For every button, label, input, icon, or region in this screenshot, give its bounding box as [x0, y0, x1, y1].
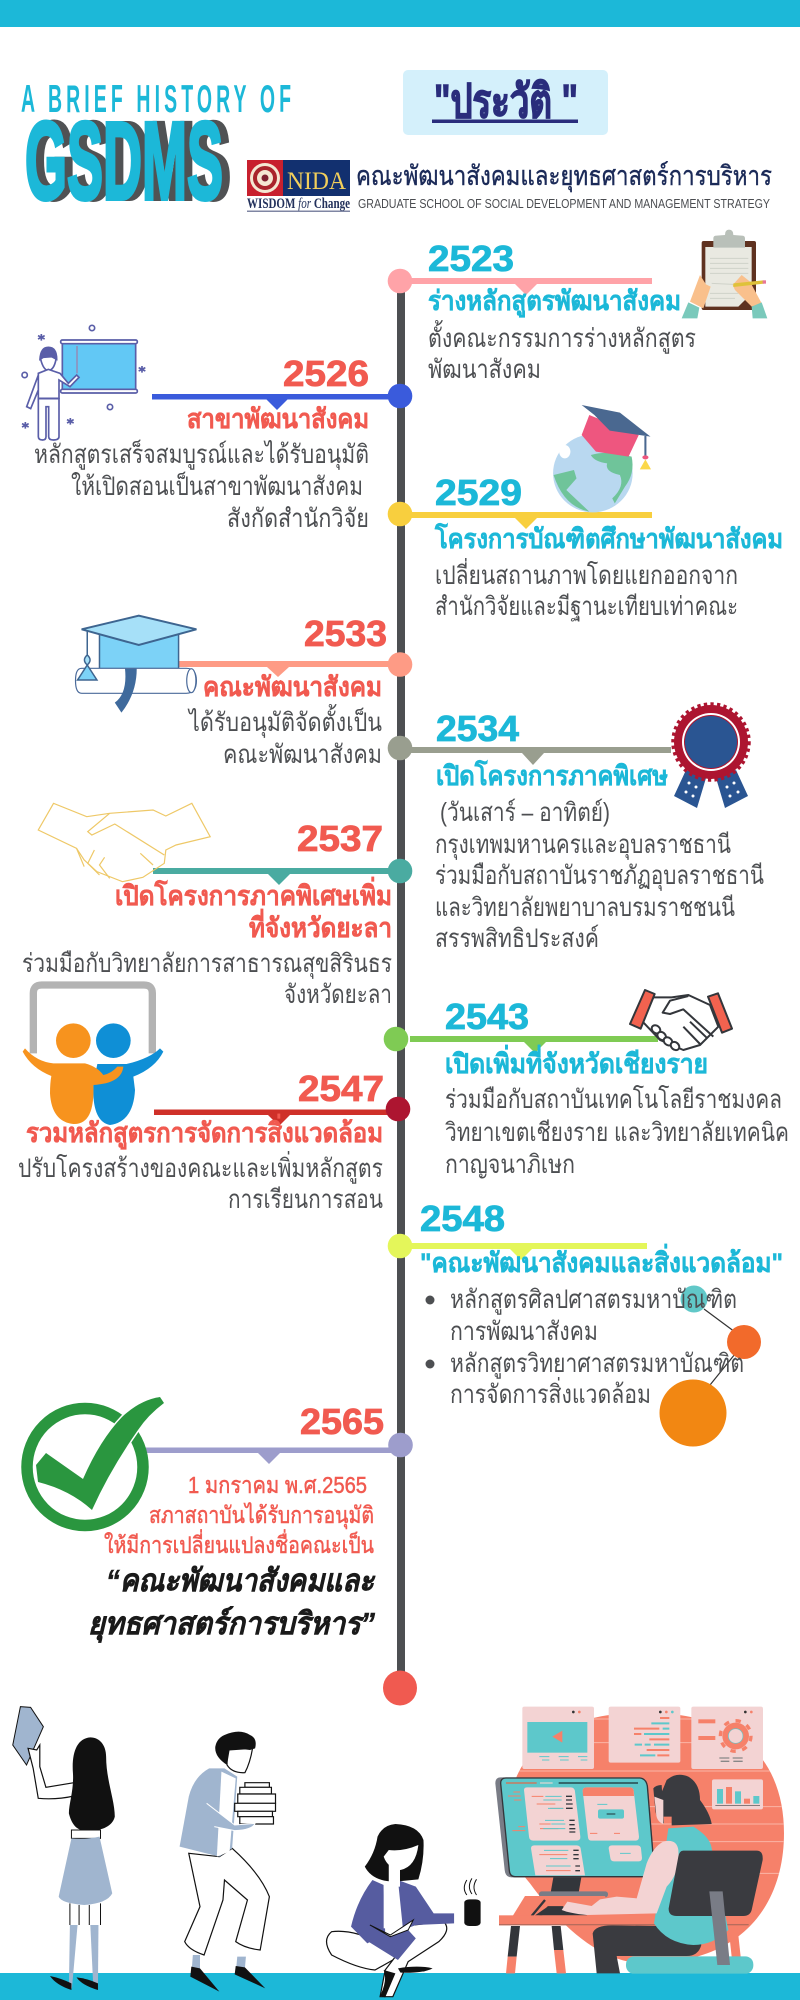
- heading badge: history: "ประวัติ ": [434, 75, 578, 127]
- text 2529: เปลี่ยนสถานภาพโดยแยกออกจาก: [435, 558, 738, 590]
- desk: [499, 1896, 749, 1973]
- programmes list 2548: หลักสูตรวิทยาศาสตรมหาบัณฑิต: [450, 1350, 744, 1379]
- decoration: connected circles: [660, 1286, 761, 1446]
- year 2543: 2543: [445, 996, 529, 1037]
- new faculty name: “คณะพัฒนาสังคมและ: [106, 1563, 376, 1598]
- heading 2537: เปิดโครงการภาคพิเศษเพิ่ม: [115, 876, 392, 911]
- icon: graduation cap and diploma: [76, 616, 196, 713]
- timeline end dot: [383, 1670, 417, 1706]
- illustration: girl holding book: [13, 1707, 115, 1990]
- illustration: woman reading with coffee: [327, 1824, 481, 1997]
- entry 2543: [384, 996, 789, 1179]
- year 2537: 2537: [297, 818, 383, 859]
- heading 2533: คณะพัฒนาสังคม: [203, 672, 382, 702]
- text 2523: พัฒนาสังคม: [428, 356, 541, 384]
- text 2526: หลักสูตรเสร็จสมบูรณ์และได้รับอนุมัติ: [34, 439, 369, 470]
- NIDA logo: NIDA: [287, 168, 346, 195]
- text 2565: ให้มีการเปลี่ยนแปลงชื่อคณะเป็น: [104, 1529, 374, 1558]
- text 2547: ปรับโครงสร้างของคณะและเพิ่มหลักสูตร: [18, 1151, 383, 1184]
- icon: teacher at board: [22, 325, 145, 440]
- title: A Brief History of GSDMS: [21, 77, 291, 223]
- heading 2543: เปิดเพิ่มที่จังหวัดเชียงราย: [445, 1044, 708, 1079]
- top banner: [0, 0, 800, 27]
- programmes list 2548: การพัฒนาสังคม: [450, 1318, 598, 1346]
- text 2533: [187, 704, 382, 769]
- text 2565: 1 มกราคม พ.ศ.2565: [188, 1472, 367, 1498]
- bar chart panel: [712, 1779, 763, 1809]
- text 2534: [435, 798, 764, 953]
- icon: green check mark: [27, 1397, 164, 1526]
- year 2526: 2526: [283, 353, 369, 394]
- heading 2526: สาขาพัฒนาสังคม: [187, 404, 369, 434]
- new faculty name: ยุทธศาสตร์การบริหาร”: [88, 1606, 375, 1643]
- text 2523: ตั้งคณะกรรมการร่างหลักสูตร: [428, 320, 696, 354]
- salmon background circle: [516, 1715, 784, 1962]
- entry 2526: [34, 353, 412, 533]
- heading 2534: เปิดโครงการภาคพิเศษ: [436, 759, 668, 791]
- year 2548: 2548: [420, 1198, 505, 1239]
- text 2565: [104, 1472, 374, 1558]
- text 2547: การเรียนการสอน: [228, 1186, 383, 1214]
- year 2533: 2533: [304, 613, 387, 654]
- programmes list 2548: หลักสูตรศิลปศาสตรมหาบัณฑิต: [450, 1286, 737, 1315]
- entry 2537: [22, 818, 412, 1009]
- text 2565: สภาสถาบันได้รับการอนุมัติ: [149, 1502, 374, 1529]
- text 2537: ร่วมมือกับวิทยาลัยการสาธารณสุขสิรินธร: [22, 950, 392, 979]
- icon: award rosette: [673, 704, 749, 808]
- illustration: woman at computer with dashboards: [495, 1707, 790, 1974]
- bottom banner: [0, 1973, 800, 2000]
- text 2523: [428, 320, 696, 384]
- NIDA logo: WISDOM for Change: [247, 196, 350, 212]
- year 2547: 2547: [298, 1068, 384, 1109]
- text 2537: [22, 950, 392, 1009]
- new faculty name: [88, 1563, 376, 1643]
- GSDMS wordmark: GSDMS: [25, 100, 223, 223]
- icon: globe with graduation cap: [553, 405, 651, 512]
- icon: clipboard and hands: [682, 230, 767, 318]
- text 2534: กรุงเทพมหานครและอุบลราชธานี: [435, 831, 731, 860]
- year 2565: 2565: [300, 1401, 384, 1442]
- year 2523: 2523: [428, 238, 514, 279]
- entry 2533: [179, 613, 412, 769]
- programmes list 2548: [426, 1286, 744, 1409]
- entry 2565: [88, 1401, 413, 1643]
- text 2534: (วันเสาร์ – อาทิตย์): [440, 798, 610, 827]
- title: A Brief History of GSDMS: GSDMS: [33, 100, 231, 223]
- heading 2547: รวมหลักสูตรการจัดการสิ่งแวดล้อม: [26, 1113, 383, 1150]
- heading 2523: ร่างหลักสูตรพัฒนาสังคม: [428, 286, 681, 318]
- text 2526: [34, 439, 369, 533]
- heading badge: history: [403, 70, 608, 135]
- icon: two people presentation frame: [23, 985, 163, 1125]
- text 2534: สรรพสิทธิประสงค์: [435, 924, 599, 953]
- monitor: [495, 1777, 655, 1877]
- year 2534: 2534: [436, 708, 519, 749]
- entry 2534: [388, 708, 764, 953]
- timeline spine: [397, 280, 405, 1690]
- year 2529: 2529: [435, 472, 522, 513]
- entry 2523: [388, 238, 696, 384]
- text 2543: กาญจนาภิเษก: [445, 1151, 575, 1179]
- text 2526: ให้เปิดสอนเป็นสาขาพัฒนาสังคม: [71, 471, 363, 501]
- text 2526: สังกัดสำนักวิจัย: [227, 505, 369, 533]
- icon: handshake with cuffs: [630, 990, 732, 1052]
- text 2543: [445, 1085, 789, 1179]
- programmes list 2548: การจัดการสิ่งแวดล้อม: [450, 1377, 651, 1409]
- subtitle line: A BRIEF HISTORY OF: [21, 77, 291, 121]
- person at computer: [562, 1775, 763, 1974]
- text 2529: [435, 558, 738, 622]
- NIDA logo: [247, 160, 350, 212]
- text 2534: และวิทยาลัยพยาบาลบรมราชชนนี: [435, 894, 735, 922]
- text 2547: [18, 1151, 383, 1214]
- text 2533: คณะพัฒนาสังคม: [223, 741, 382, 769]
- entry 2547: [18, 1068, 410, 1214]
- gear panel: [691, 1707, 763, 1769]
- code panel: [609, 1707, 680, 1763]
- heading 2537: ที่จังหวัดยะลา: [249, 908, 392, 943]
- entry 2548: [388, 1198, 783, 1278]
- text 2533: ได้รับอนุมัติจัดตั้งเป็น: [187, 704, 382, 738]
- text 2537: จังหวัดยะลา: [284, 981, 392, 1009]
- illustration: man carrying books: [180, 1732, 276, 1992]
- icon: handshake outline: [38, 803, 210, 882]
- GSDMS wordmark: [25, 100, 231, 223]
- monitor stand: [551, 1877, 581, 1893]
- video panel: [522, 1707, 594, 1769]
- entry 2529: [388, 472, 783, 622]
- heading 2537: [115, 876, 392, 943]
